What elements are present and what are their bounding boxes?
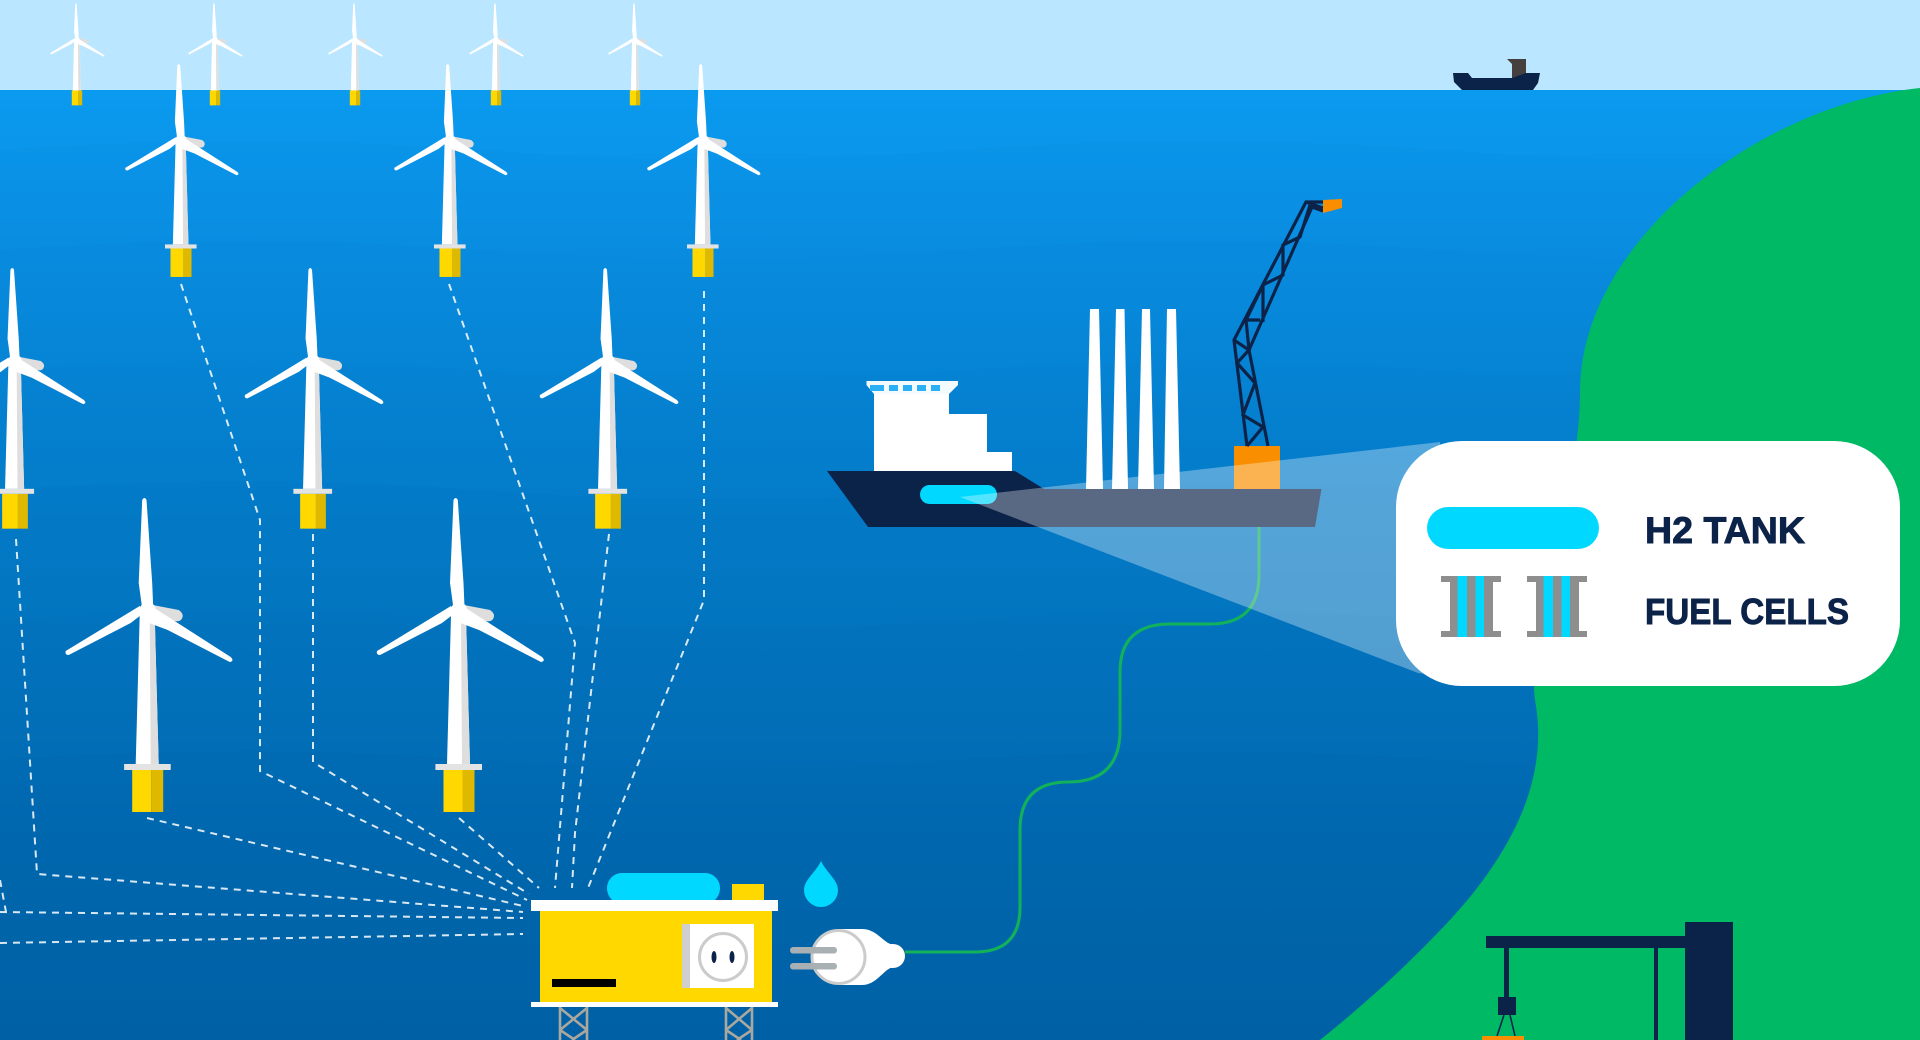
harbour crane [1482, 922, 1733, 1040]
distant ship [1453, 59, 1540, 90]
sky [0, 0, 1920, 90]
crane [1234, 199, 1342, 489]
wall socket [682, 924, 754, 988]
legend label: fuel cells: FUEL CELLS [1645, 591, 1849, 632]
land [1320, 88, 1920, 1040]
green power cable [905, 527, 1259, 952]
icon: plug [790, 929, 905, 985]
callout light cone [960, 442, 1440, 676]
legend icon: fuel cells [1441, 576, 1587, 637]
front-row turbines [66, 498, 544, 812]
middle-row turbines [0, 268, 678, 529]
turbine towers on deck [1086, 309, 1180, 489]
small roof box [732, 884, 764, 900]
legend icon: H2 tank [1427, 507, 1599, 549]
platform body [540, 911, 772, 1002]
ship H2 tank [920, 485, 997, 504]
ship bridge [866, 381, 958, 394]
platform H2 tank [607, 873, 720, 900]
installation vessel [827, 199, 1342, 527]
distant turbines [50, 3, 663, 105]
platform legs [560, 1006, 752, 1040]
icon: water drop [804, 861, 838, 907]
callout panel [1396, 441, 1900, 686]
ship superstructure [874, 393, 1012, 471]
near-row turbines [125, 64, 760, 277]
hydrogen platform [531, 873, 778, 1040]
legend label: H2 tank: H2 TANK [1645, 510, 1805, 551]
ship hull [827, 471, 1322, 527]
inter-array cables [0, 284, 704, 943]
